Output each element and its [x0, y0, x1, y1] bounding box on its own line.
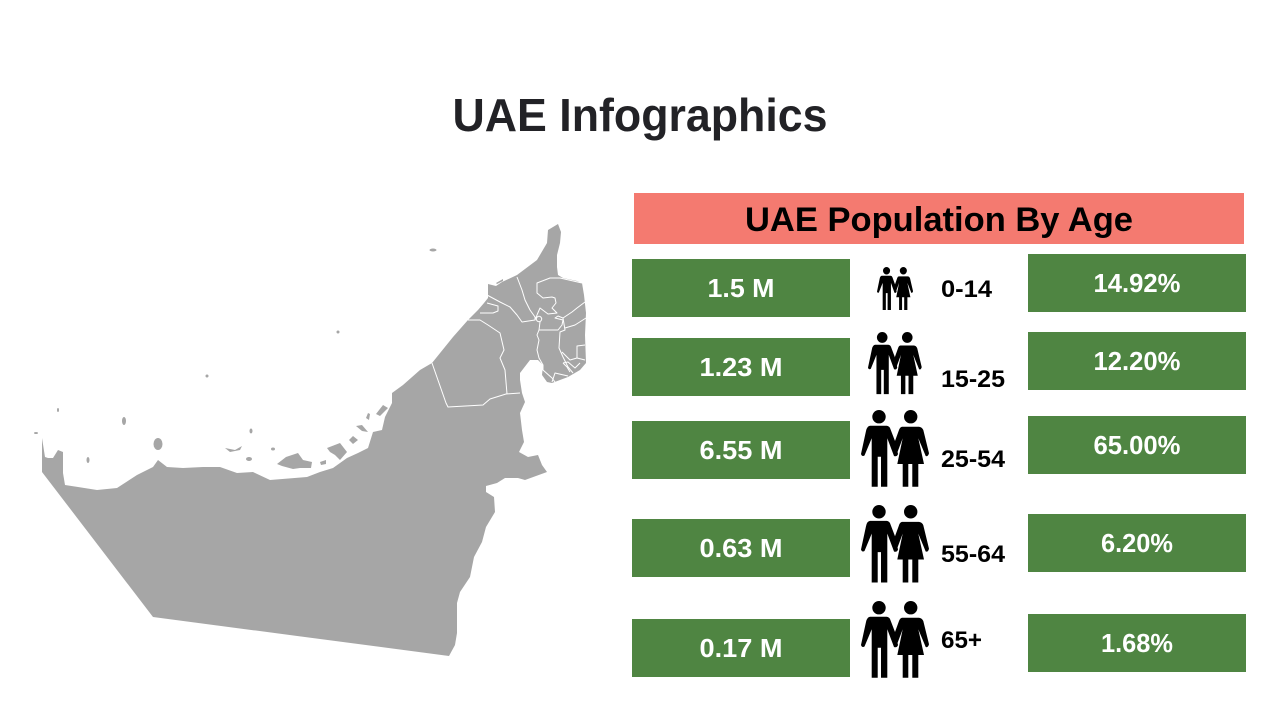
- share 65+: [1028, 614, 1246, 672]
- population value 25-54: 6.55 M: [700, 435, 782, 465]
- population value 65+: 0.17 M: [700, 633, 782, 663]
- title: UAE Infographics: [452, 89, 828, 141]
- population value 0-14: 1.5 M: [708, 273, 774, 303]
- map: mainland shape: [42, 224, 586, 656]
- share 0-14: 14.92%: [1094, 268, 1180, 298]
- banner: UAE Population By Age: UAE Population By Age: [745, 201, 1133, 239]
- map: islands: [34, 248, 503, 469]
- share 65+: 1.68%: [1101, 628, 1173, 658]
- population value 15-25: [632, 338, 850, 396]
- population value 15-25: 1.23 M: [700, 352, 782, 382]
- icon: older adult pair: [861, 505, 929, 582]
- banner: UAE Population By Age: [634, 193, 1244, 244]
- icon: adult pair: [861, 410, 929, 487]
- share 25-54: [1028, 416, 1246, 474]
- age label 55-64: 55-64: [941, 541, 1006, 568]
- population value 55-64: [632, 519, 850, 577]
- share 55-64: [1028, 514, 1246, 572]
- population value 0-14: [632, 259, 850, 317]
- population value 65+: [632, 619, 850, 677]
- share 15-25: 12.20%: [1094, 346, 1180, 376]
- icon: youth pair: [868, 332, 922, 394]
- age label 15-25: 15-25: [941, 366, 1005, 393]
- population value 25-54: [632, 421, 850, 479]
- age label 65+: 65+: [941, 627, 982, 654]
- row: 55-64: [632, 505, 1246, 582]
- row: 65+: [632, 601, 1246, 678]
- icon: children pair: [877, 267, 913, 310]
- age label 0-14: 0-14: [941, 276, 993, 303]
- share 15-25: [1028, 332, 1246, 390]
- icon: senior pair: [861, 601, 929, 678]
- share 0-14: [1028, 254, 1246, 312]
- age label 25-54: 25-54: [941, 446, 1006, 473]
- row: 25-54: [632, 410, 1246, 487]
- map: emirate borders: [432, 277, 586, 407]
- share 25-54: 65.00%: [1094, 430, 1180, 460]
- map: UAE: [34, 224, 586, 656]
- row: 0-14: [632, 254, 1246, 317]
- share 55-64: 6.20%: [1101, 528, 1173, 558]
- row: 15-25: [632, 332, 1246, 396]
- population value 55-64: 0.63 M: [700, 533, 782, 563]
